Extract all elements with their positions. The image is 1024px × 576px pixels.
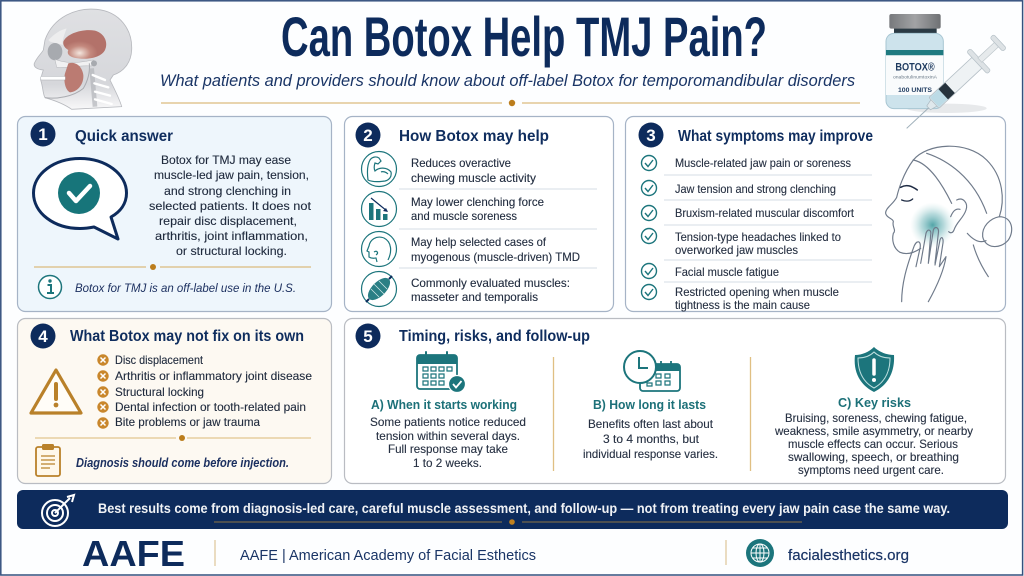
title: Can Botox Help TMJ Pain? bbox=[281, 5, 767, 68]
heading: quick answer: Quick answer bbox=[75, 128, 173, 145]
icon: falling bar chart bbox=[362, 192, 396, 226]
text: myogenous TMD: myogenous (muscle-driven) TMD bbox=[411, 250, 580, 264]
text block: quick answer: repair disc displacement, bbox=[159, 214, 297, 228]
number badge 1 bbox=[30, 122, 56, 146]
subheading B: B) How long it lasts bbox=[593, 397, 706, 412]
symptom list: Muscle-related jaw pain or soreness bbox=[675, 157, 851, 170]
list: not fixed conditions: Dental infection or tooth-related pain bbox=[115, 400, 306, 414]
icon: shield with exclamation bbox=[855, 347, 894, 392]
symptom list: Jaw tension and strong clenching bbox=[675, 183, 836, 196]
icon: clipboard bbox=[36, 444, 60, 476]
text: lower clenching force: and muscle soreness bbox=[411, 209, 517, 223]
text: myogenous TMD: May help selected cases of bbox=[411, 235, 547, 249]
body A bbox=[370, 416, 526, 470]
heading: what Botox may not fix: What Botox may not fix on its own bbox=[70, 328, 304, 345]
illustration: Botox vial and syringe: onabotulinumtoxinA bbox=[893, 75, 938, 80]
body C: muscle effects can occur. Serious bbox=[788, 438, 958, 451]
number badge 2 bbox=[356, 122, 380, 148]
text: commonly evaluated muscles: masseter and temporalis bbox=[411, 290, 538, 304]
panel 2: how Botox may help bbox=[344, 116, 614, 312]
text block: quick answer: Botox for TMJ may ease bbox=[161, 153, 291, 167]
icon: calendar with check bbox=[417, 352, 466, 392]
body C: Bruising, soreness, chewing fatigue, bbox=[785, 412, 967, 425]
icon: speech bubble with check bbox=[34, 158, 126, 239]
symptom list: Facial muscle fatigue bbox=[675, 266, 779, 279]
subtitle: What patients and providers should know about off-label Botox for temporomandibular disorders bbox=[160, 71, 855, 90]
banner: takeaway bbox=[17, 490, 1008, 529]
text: lower clenching force: May lower clenching force bbox=[411, 195, 544, 209]
body B bbox=[583, 418, 718, 461]
symptom list bbox=[642, 156, 855, 312]
icon: warning triangle bbox=[31, 370, 81, 413]
body B: individual response varies. bbox=[583, 448, 718, 461]
text: reduces activity: chewing muscle activity bbox=[411, 171, 536, 185]
body C: swallowing, speech, or breathing bbox=[788, 451, 959, 464]
symptom list: Bruxism-related muscular discomfort bbox=[675, 207, 855, 220]
footer bbox=[82, 533, 909, 574]
logo: AAFE: AAFE bbox=[82, 533, 185, 574]
symptom list: Restricted opening when muscle bbox=[675, 286, 839, 299]
body A: tension within several days. bbox=[376, 430, 520, 443]
icon: target with arrow bbox=[42, 495, 74, 526]
number badge 5 bbox=[356, 324, 380, 348]
heading: timing, risks, and follow-up: Timing, risks, and follow-up bbox=[399, 328, 590, 345]
body C: weakness, smile asymmetry, or nearby bbox=[774, 425, 973, 438]
text: commonly evaluated muscles bbox=[411, 276, 570, 304]
body B: Benefits often last about bbox=[588, 418, 714, 431]
subheading A: A) When it starts working bbox=[371, 397, 517, 412]
body C bbox=[774, 412, 973, 477]
text: lower clenching force bbox=[411, 195, 544, 223]
note: diagnosis first: Diagnosis should come before injection. bbox=[76, 456, 289, 470]
text block: quick answer: selected patients. It does not bbox=[149, 199, 312, 213]
panel 4: what Botox may not fix bbox=[18, 318, 332, 484]
body B: 3 to 4 months, but bbox=[603, 433, 700, 446]
column A: when it starts working bbox=[370, 352, 526, 470]
organisation name: AAFE | American Academy of Facial Esthetics bbox=[240, 547, 536, 564]
text: reduces activity bbox=[411, 156, 536, 185]
note: off-label: Botox for TMJ is an off-label use in the U.S. bbox=[75, 281, 296, 295]
number badge 5: 5 bbox=[363, 327, 373, 346]
panel 1: quick answer bbox=[18, 116, 332, 312]
title divider bbox=[161, 100, 860, 106]
number badge 3: 3 bbox=[646, 126, 656, 145]
icon: info bbox=[38, 276, 62, 298]
website: facialesthetics.org bbox=[788, 547, 909, 564]
illustration: Botox vial and syringe: BOTOX® bbox=[895, 62, 935, 74]
panel 5: timing, risks, and follow-up bbox=[344, 318, 1006, 484]
number badge 1: 1 bbox=[38, 125, 48, 144]
text block: quick answer bbox=[149, 153, 312, 258]
illustration: woman holding jaw bbox=[886, 146, 1012, 302]
icon: clock and calendar bbox=[624, 351, 680, 391]
illustration: Botox vial and syringe: 100 UNITS bbox=[898, 87, 933, 94]
column C: key risks bbox=[774, 347, 973, 477]
icon: head profile bbox=[362, 232, 396, 266]
text: myogenous TMD bbox=[411, 235, 580, 264]
text block: quick answer: or structural locking. bbox=[176, 244, 287, 258]
icon: globe bbox=[746, 539, 774, 567]
list: not fixed conditions: Bite problems or jaw trauma bbox=[115, 415, 260, 429]
takeaway text: Best results come from diagnosis-led care, careful muscle assessment, and follow-up — not from treating every jaw pain case the same way. bbox=[98, 501, 950, 516]
number badge 3 bbox=[638, 122, 664, 148]
text block: quick answer: arthritis, joint inflammation, bbox=[155, 229, 308, 243]
number badge 2: 2 bbox=[363, 126, 373, 145]
body C: symptoms need urgent care. bbox=[798, 464, 944, 477]
heading: how Botox may help: How Botox may help bbox=[399, 128, 549, 145]
number badge 4: 4 bbox=[38, 327, 48, 346]
text block: quick answer: muscle-led jaw pain, tension, bbox=[154, 168, 309, 182]
heading: what symptoms may improve: What symptoms may improve bbox=[678, 128, 873, 145]
list: not fixed conditions: Structural locking bbox=[115, 385, 204, 399]
body A: Full response may take bbox=[388, 443, 508, 456]
illustration: Botox vial and syringe bbox=[886, 14, 1010, 139]
icon: muscle spindle bbox=[362, 272, 396, 306]
list: not fixed conditions bbox=[97, 353, 312, 429]
list: not fixed conditions: Disc displacement bbox=[115, 353, 204, 367]
body A: 1 to 2 weeks. bbox=[413, 457, 482, 470]
symptom list: tightness is the main cause bbox=[675, 299, 810, 312]
icon: flexed arm muscle bbox=[362, 152, 396, 186]
number badge 4 bbox=[30, 324, 56, 348]
subheading C: C) Key risks bbox=[838, 395, 911, 410]
illustration: skull with jaw muscles bbox=[34, 9, 132, 109]
body A: Some patients notice reduced bbox=[370, 416, 526, 429]
symptom list: overworked jaw muscles bbox=[675, 244, 798, 257]
symptom list: Tension-type headaches linked to bbox=[675, 231, 841, 244]
list: not fixed conditions: Arthritis or inflammatory joint disease bbox=[115, 369, 312, 383]
text: commonly evaluated muscles: Commonly evaluated muscles: bbox=[411, 276, 570, 290]
column B: how long it lasts bbox=[583, 351, 718, 461]
text: reduces activity: Reduces overactive bbox=[411, 156, 511, 170]
panel 3: what symptoms may improve bbox=[626, 116, 1012, 312]
text block: quick answer: and strong clenching in bbox=[164, 184, 291, 198]
